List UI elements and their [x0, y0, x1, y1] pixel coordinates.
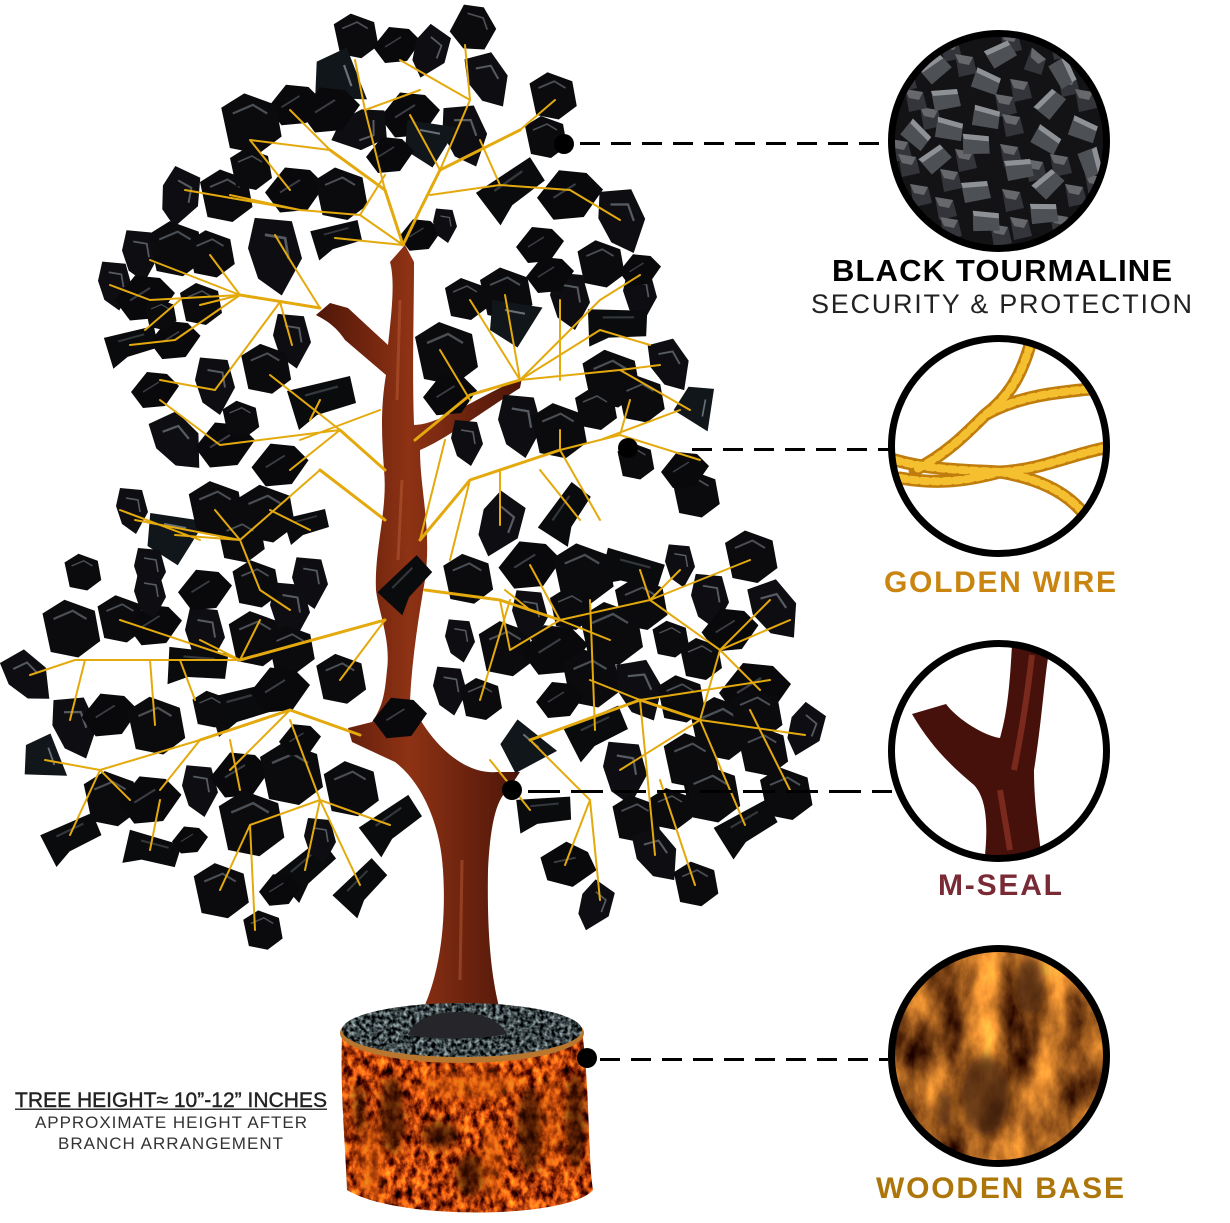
label: wooden base: WOODEN BASE: [876, 1172, 1124, 1205]
label: black tourmaline: [811, 253, 1192, 319]
callout dot: m-seal: [502, 780, 892, 800]
black tourmaline stones: [0, 0, 833, 950]
tree trunk: [316, 245, 522, 1035]
gravel top: [340, 1003, 584, 1063]
circle: m-seal close-up: [885, 640, 1115, 865]
tree height note: APPROXIMATE HEIGHT AFTER: [35, 1113, 307, 1132]
callout dot: wooden base: [577, 1048, 888, 1068]
callout dot: golden wire: [618, 438, 894, 458]
tree height note: TREE HEIGHT≈ 10”-12” INCHES: [15, 1089, 327, 1112]
label: black tourmaline: SECURITY & PROTECTION: [811, 289, 1192, 319]
circle: wooden base close-up: [885, 945, 1115, 1170]
label: black tourmaline: BLACK TOURMALINE: [832, 253, 1172, 288]
label: m-seal: M-SEAL: [938, 869, 1062, 902]
trunk foot mound: [408, 1012, 507, 1039]
golden wire branches: [30, 45, 805, 930]
tree height note: BRANCH ARRANGEMENT: [58, 1134, 283, 1153]
circle: golden wire close-up: [885, 335, 1115, 560]
wooden base: [340, 1003, 593, 1212]
bark body: [342, 1036, 593, 1212]
label: golden wire: GOLDEN WIRE: [884, 566, 1116, 599]
tree height note: [15, 1089, 327, 1153]
circle: black tourmaline close-up: [885, 30, 1115, 255]
callout dot: tourmaline: [554, 134, 888, 154]
